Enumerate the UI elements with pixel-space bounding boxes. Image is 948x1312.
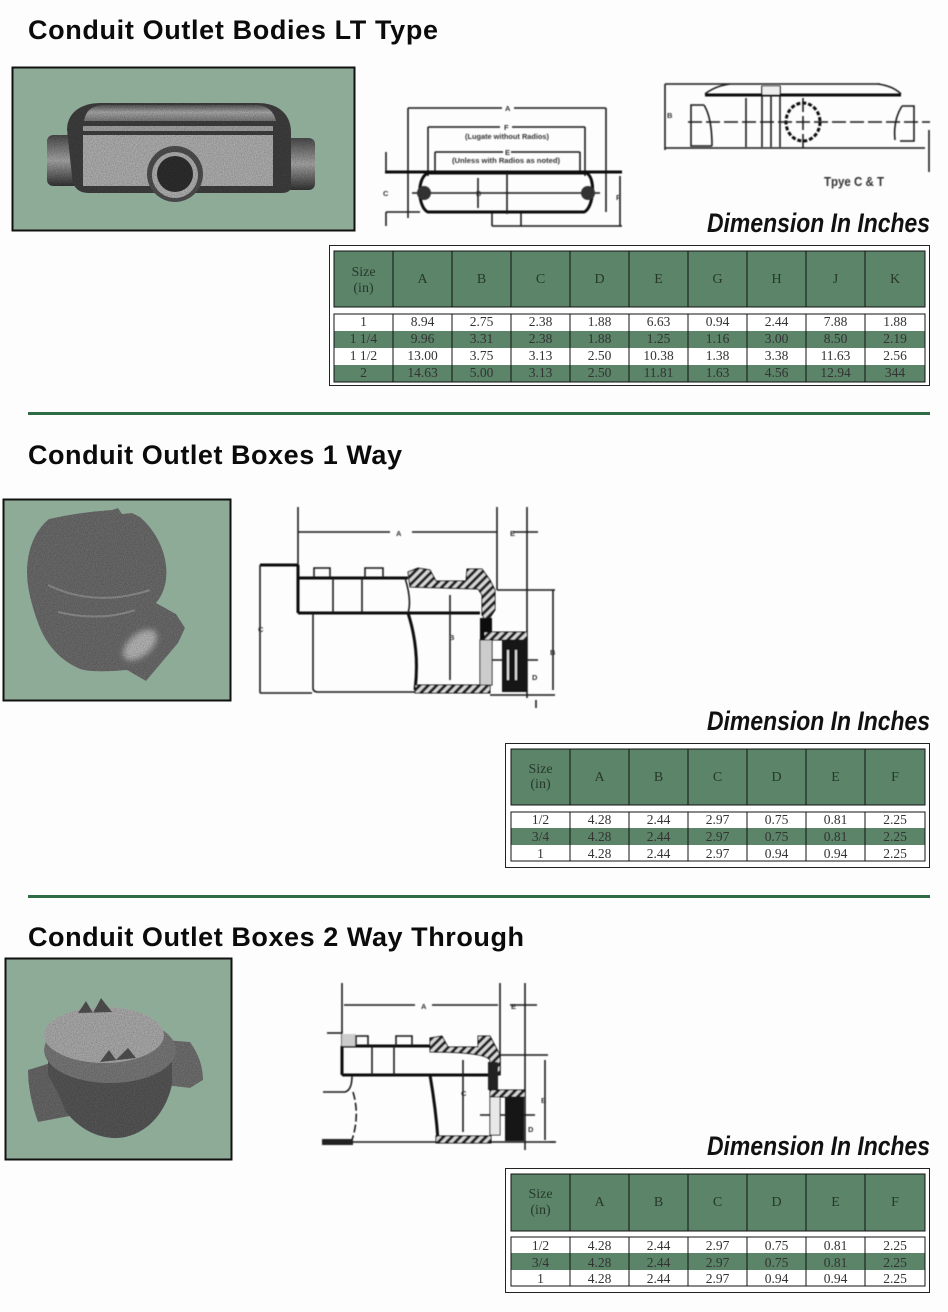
table rows: 2.75 [470,314,494,329]
dimension labels: A [421,1002,427,1011]
table rows: 2.25 [883,846,907,861]
table header: (in) [530,1203,551,1218]
table rows: 0.94 [706,314,730,329]
table header: B [654,1195,663,1210]
table rows: 1.88 [588,331,612,346]
table header: Size [528,762,553,777]
table rows: 9.96 [411,331,435,346]
table rows: 0.75 [765,829,789,844]
table rows: 0.94 [765,1271,789,1286]
dimension labels: E [511,1002,516,1011]
table header [511,749,925,805]
table header: D [771,1195,782,1210]
table rows: 2.25 [883,812,907,827]
table rows: 5.00 [470,365,494,380]
table rows: 1 [360,314,367,329]
table rows: 344 [885,365,905,380]
table rows: 2.25 [883,1255,907,1270]
photo panel: 2 way box [6,958,232,1160]
table header: A [417,272,428,287]
table rows: 2.44 [647,1255,671,1270]
table rows: 2.25 [883,1238,907,1253]
table header: F [891,770,899,785]
table rows: 4.28 [588,829,612,844]
photo panel: LT outlet body [12,68,354,230]
dimension labels: P [616,193,621,202]
table rows: 1 [537,1271,544,1286]
table header: D [771,770,782,785]
table rows: 2.97 [706,812,730,827]
photo panel: 1 way box [4,500,230,700]
table header: (in) [530,777,551,792]
table rows: 2.25 [883,829,907,844]
table header: A [594,1195,605,1210]
table rows: 0.81 [824,1255,847,1270]
table rows: 4.28 [588,1238,612,1253]
table header: H [771,272,782,287]
table rows: 11.81 [644,365,673,380]
table rows: 0.81 [824,1238,847,1253]
table rows: 2.44 [647,812,671,827]
table rows: 3.13 [529,365,553,380]
table rows: 4.28 [588,1255,612,1270]
table header: C [713,770,722,785]
table rows: 2.25 [883,1271,907,1286]
table rows: 2.38 [529,314,553,329]
table rows: 4.28 [588,812,612,827]
dimension labels: (Lugate without Radios) [465,132,549,141]
table rows: 2.97 [706,1271,730,1286]
table rows: 0.94 [765,846,789,861]
table rows: 1 1/2 [350,348,377,363]
table header: C [713,1195,722,1210]
table header: C [536,272,545,287]
dimension labels: D [532,673,538,682]
table rows: 1 1/4 [350,331,377,346]
table rows [511,812,925,861]
table rows: 2.44 [765,314,789,329]
table rows: 0.94 [824,846,848,861]
table rows: 0.81 [824,829,847,844]
table header: K [890,272,900,287]
table header: Size [351,265,376,280]
table: 2 way dimensions [506,1168,930,1292]
table rows: 14.63 [407,365,438,380]
table: LT dimensions [330,246,930,386]
table header: B [654,770,663,785]
icon: 1 way box casting [27,508,185,681]
table rows: 1/2 [532,812,549,827]
table rows: 2.38 [529,331,553,346]
table header: D [594,272,605,287]
dimension labels: B [550,648,556,657]
table rows: 8.94 [411,314,435,329]
diagram: LT side view Type C & T: B [667,111,673,120]
table rows: 3/4 [532,1255,549,1270]
dimension labels: C [258,625,264,634]
dimension labels [258,529,556,682]
table header: (in) [353,281,374,296]
dimension labels: A [505,104,511,113]
table rows: 3/4 [532,829,549,844]
table rows: 2.44 [647,829,671,844]
table rows: 3.13 [529,348,553,363]
table rows: 2.97 [706,846,730,861]
table rows: 1/2 [532,1238,549,1253]
table rows: 8.50 [824,331,848,346]
table rows: 13.00 [407,348,438,363]
table rows: 0.75 [765,812,789,827]
table rows: 4.56 [765,365,789,380]
diagram: LT side view Type C & T [665,84,930,189]
table header: Size [528,1187,553,1202]
table rows: 3.00 [765,331,789,346]
diagram: 2 way section [323,983,556,1150]
table rows: 11.63 [821,348,851,363]
table rows: 12.94 [820,365,851,380]
table header: E [654,272,663,287]
table rows: 2.19 [883,331,907,346]
dimension labels [421,1002,547,1134]
table rows: 2.97 [706,1255,730,1270]
dimension labels: B [541,1096,547,1105]
table rows: 0.81 [824,812,847,827]
diagram: 1 way section [258,507,556,708]
table rows: 2.44 [647,1238,671,1253]
table rows: 6.63 [647,314,671,329]
table rows: 10.38 [643,348,674,363]
table rows: 2.50 [588,365,612,380]
table header: J [833,272,839,287]
table rows: 2.97 [706,829,730,844]
dimension labels: D [528,1125,534,1134]
icon: LT conduit body [47,103,315,202]
table header [334,251,925,307]
table rows: 1.88 [588,314,612,329]
table header: B [477,272,486,287]
table rows: 1.88 [883,314,907,329]
dimension labels: D [476,189,482,198]
table header [511,1174,925,1231]
table rows: 1.63 [706,365,730,380]
table rows: 2.44 [647,1271,671,1286]
dimension labels: B [449,633,455,642]
table rows: 4.28 [588,1271,612,1286]
dimension labels: C [461,1089,467,1098]
dimension labels: E [510,529,515,538]
heading: 1 Way: Conduit Outlet Boxes 1 Way [28,440,402,470]
table: 1 way dimensions [506,744,930,868]
table rows [334,314,925,382]
table header: A [594,770,605,785]
table rows: 3.75 [470,348,494,363]
table rows: 0.94 [824,1271,848,1286]
heading: 2 Way Through: Conduit Outlet Boxes 2 Way Through [28,922,524,952]
table rows: 2.97 [706,1238,730,1253]
dimension labels [383,104,621,202]
dimension labels: C [383,189,389,198]
table rows: 3.31 [470,331,493,346]
dimension labels: A [396,529,402,538]
table header: E [831,770,840,785]
diagram: LT plan view [383,104,622,226]
table rows: 4.28 [588,846,612,861]
table rows: 2.44 [647,846,671,861]
dimension labels: F [504,123,509,132]
table rows: 0.75 [765,1238,789,1253]
table rows: 2.50 [588,348,612,363]
table rows [511,1237,925,1286]
table rows: 2.56 [883,348,907,363]
table header: E [831,1195,840,1210]
table header: G [712,272,723,287]
table rows: 1.25 [647,331,671,346]
table rows: 3.38 [765,348,789,363]
table header: F [891,1195,899,1210]
table rows: 1.16 [706,331,730,346]
dimension labels: E [505,148,510,157]
diagram label: Tpye C & T [824,174,884,189]
table rows: 7.88 [824,314,848,329]
table rows: 1 [537,846,544,861]
dimension labels: (Unless with Radios as noted) [452,156,561,165]
icon: 2 way box casting [28,998,203,1138]
heading: LT Type: Conduit Outlet Bodies LT Type [28,15,438,45]
table rows: 0.75 [765,1255,789,1270]
table rows: 2 [360,365,367,380]
table rows: 1.38 [706,348,730,363]
